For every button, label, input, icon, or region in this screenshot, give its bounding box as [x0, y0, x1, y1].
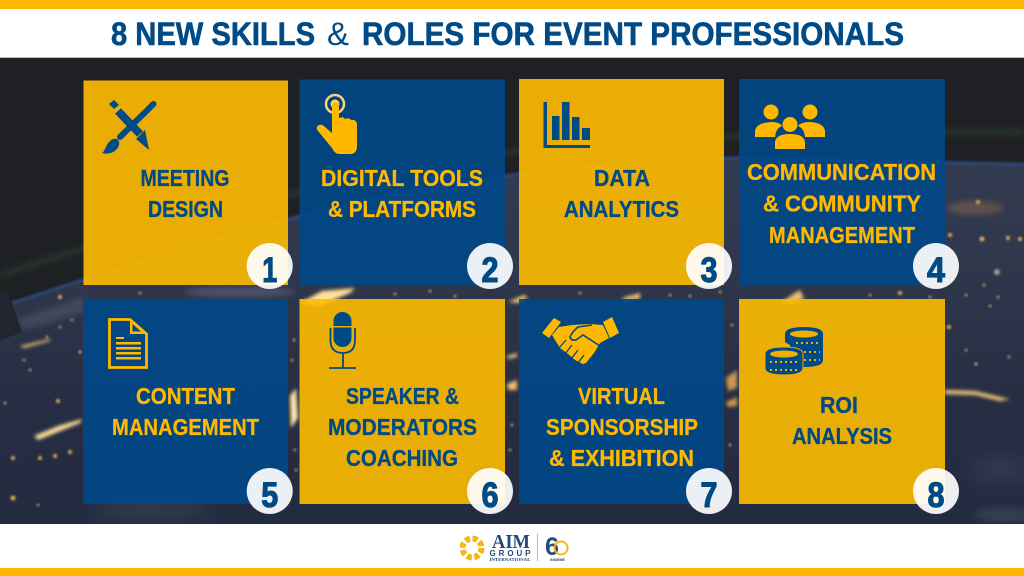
label — [112, 383, 259, 440]
badge 7 — [686, 468, 732, 515]
logo: AIM Group International: GROUP — [490, 549, 531, 558]
label: & COMMUNITY — [763, 190, 921, 216]
label: MEETING — [140, 165, 230, 191]
bottom yellow band — [0, 568, 1024, 576]
badge 6: 6 — [482, 476, 498, 515]
label: MANAGEMENT — [112, 414, 259, 440]
label: SPONSORSHIP — [546, 414, 698, 440]
logo: AIM Group International: 6 — [545, 533, 559, 561]
label: ANALYTICS — [564, 196, 679, 222]
icon: bar chart — [544, 102, 590, 148]
badge 1: 1 — [262, 251, 277, 290]
label: VIRTUAL — [578, 383, 665, 409]
label: DATA — [594, 165, 650, 191]
city light dots — [4, 200, 1022, 506]
panel: 7 virtual sponsorship — [519, 299, 732, 515]
label — [328, 383, 477, 471]
panel: 2 digital tools — [300, 80, 513, 290]
badge 8: 8 — [928, 476, 944, 515]
icon: pencil and brush — [102, 100, 154, 154]
title: 8 NEW SKILLS — [111, 16, 315, 52]
icon: document — [110, 319, 147, 368]
label — [747, 159, 936, 248]
badge 5: 5 — [261, 476, 278, 515]
label — [546, 383, 698, 471]
panel: 6 speaker coaching — [300, 299, 513, 515]
label: CONTENT — [136, 383, 235, 409]
label: COMMUNICATION — [747, 159, 936, 185]
icon: coins — [765, 327, 823, 375]
icon: people — [755, 104, 825, 149]
badge 8 — [913, 468, 959, 515]
badge 3 — [686, 243, 732, 290]
logo: AIM Group International: AIM — [492, 531, 530, 553]
icon: microphone — [329, 312, 356, 368]
label — [140, 165, 230, 222]
panel: 5 content management — [83, 299, 293, 515]
city light streaks — [20, 288, 1010, 440]
title band — [0, 9, 1024, 58]
badge 4 — [913, 243, 959, 290]
label — [792, 392, 892, 449]
label — [564, 165, 679, 222]
panel: 8 roi analysis — [739, 299, 959, 515]
logo: AIM Group International — [462, 531, 568, 562]
label: COACHING — [346, 445, 458, 471]
badge 4: 4 — [927, 251, 945, 290]
badge 5 — [247, 468, 293, 515]
label — [321, 165, 483, 222]
title — [111, 16, 904, 52]
label: DESIGN — [148, 196, 223, 222]
badge 6 — [467, 468, 513, 515]
footer band — [0, 524, 1024, 568]
label: MANAGEMENT — [769, 222, 915, 248]
logo: AIM Group International: INSIEME — [550, 558, 566, 562]
badge 7: 7 — [700, 476, 718, 515]
badge 3: 3 — [700, 251, 718, 290]
panel: 4 communication — [739, 79, 959, 290]
title: ROLES FOR EVENT PROFESSIONALS — [362, 16, 904, 52]
icon: handshake — [542, 317, 619, 364]
label: MODERATORS — [328, 414, 477, 440]
panel: 1 meeting design — [84, 80, 293, 290]
badge 2: 2 — [482, 251, 498, 290]
label: & EXHIBITION — [549, 445, 694, 471]
label: ANALYSIS — [792, 423, 892, 449]
badge 1 — [247, 243, 293, 290]
label: ROI — [820, 392, 858, 418]
label: & PLATFORMS — [328, 196, 476, 222]
top yellow band — [0, 0, 1024, 9]
icon: touch hand — [317, 95, 357, 154]
logo sun mark — [462, 538, 482, 558]
badge 2 — [467, 243, 513, 290]
label: DIGITAL TOOLS — [321, 165, 483, 191]
label: SPEAKER & — [346, 383, 459, 409]
panel: 3 data analytics — [519, 79, 732, 290]
logo: AIM Group International: INTERNATIONAL — [490, 557, 530, 562]
title: & — [327, 16, 349, 52]
